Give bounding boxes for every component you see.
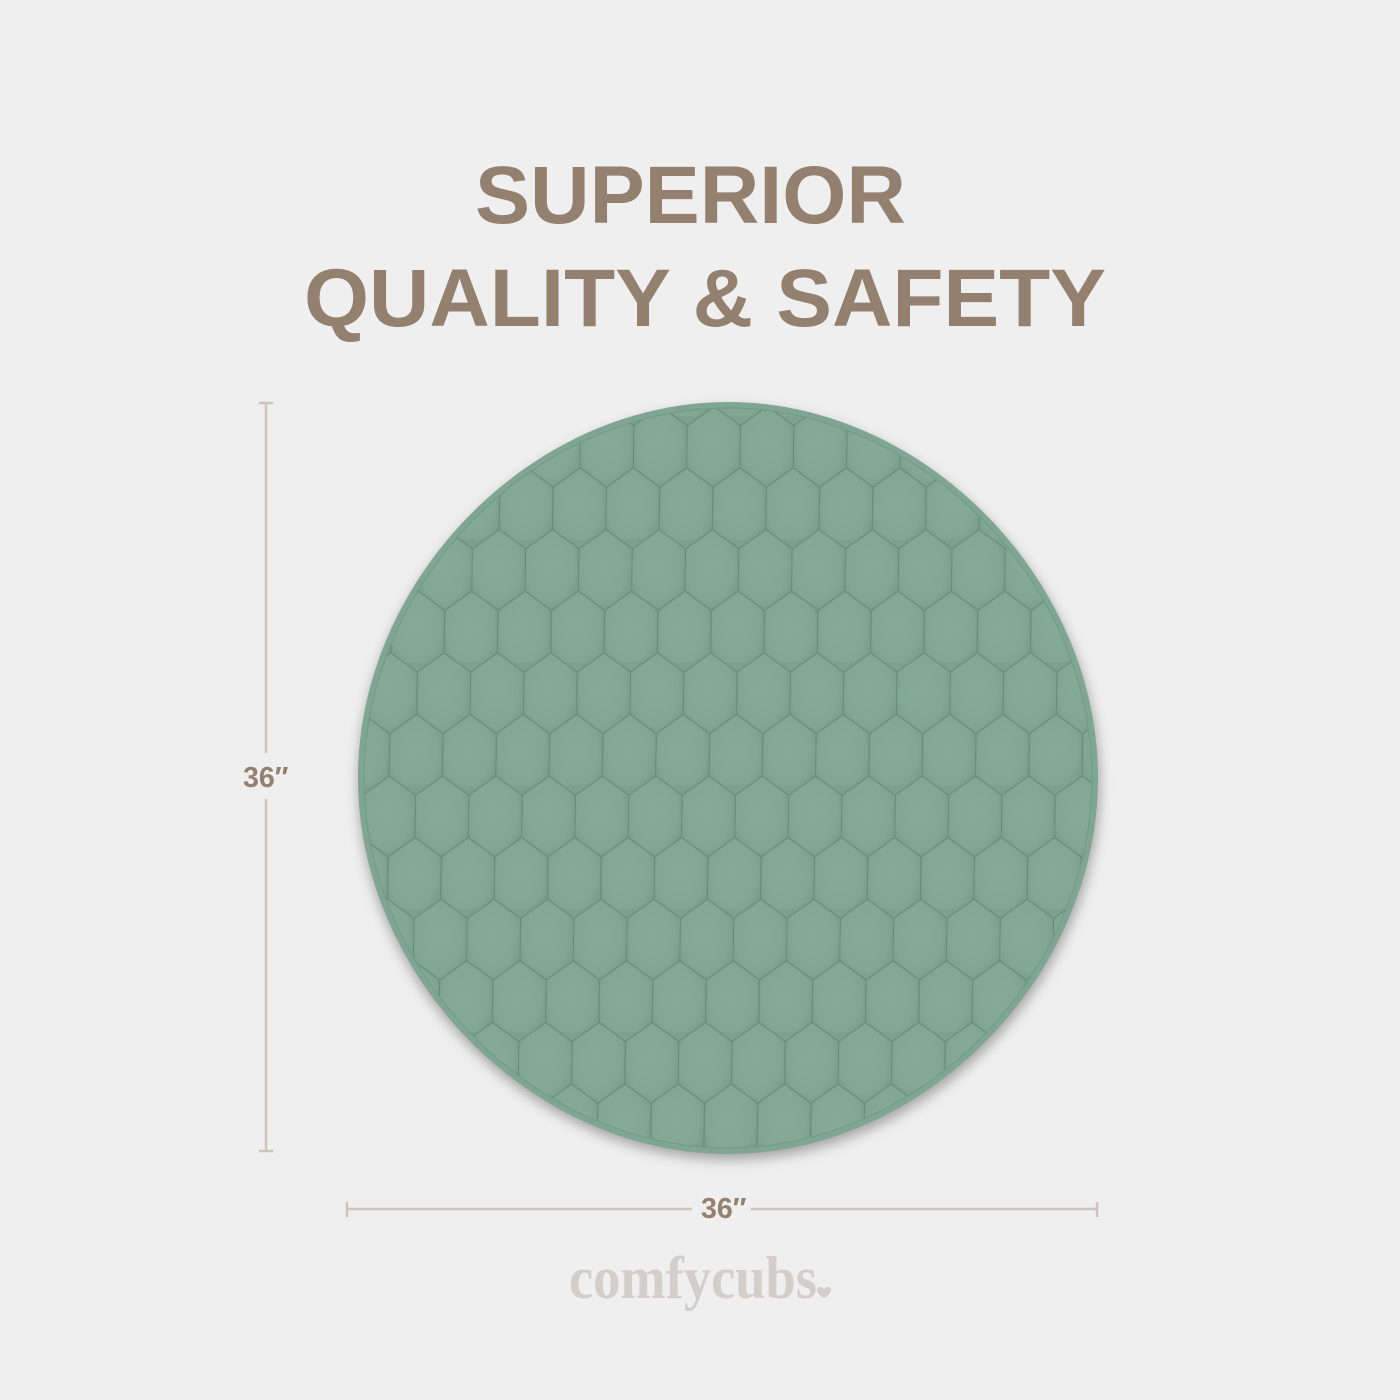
vertical dimension: 36 inches: 36″: [243, 762, 289, 794]
title: SUPERIOR: [475, 150, 906, 241]
vertical dimension: 36 inches: [243, 403, 289, 1151]
binding seam: [364, 408, 1092, 1148]
round quilted play mat: [350, 395, 1110, 1161]
horizontal dimension: 36 inches: [347, 1193, 1097, 1225]
honeycomb quilting: [350, 395, 1110, 1161]
title: QUALITY & SAFETY: [304, 253, 1106, 344]
brand logo: comfycubs: [569, 1245, 817, 1311]
title: [304, 150, 1106, 344]
mat binding edge: [358, 402, 1098, 1154]
horizontal dimension: 36 inches: 36″: [701, 1193, 747, 1225]
mat shadow: [358, 408, 1100, 1160]
icon: heart: [817, 1287, 831, 1298]
infographic canvas: [244, 166, 1107, 1311]
